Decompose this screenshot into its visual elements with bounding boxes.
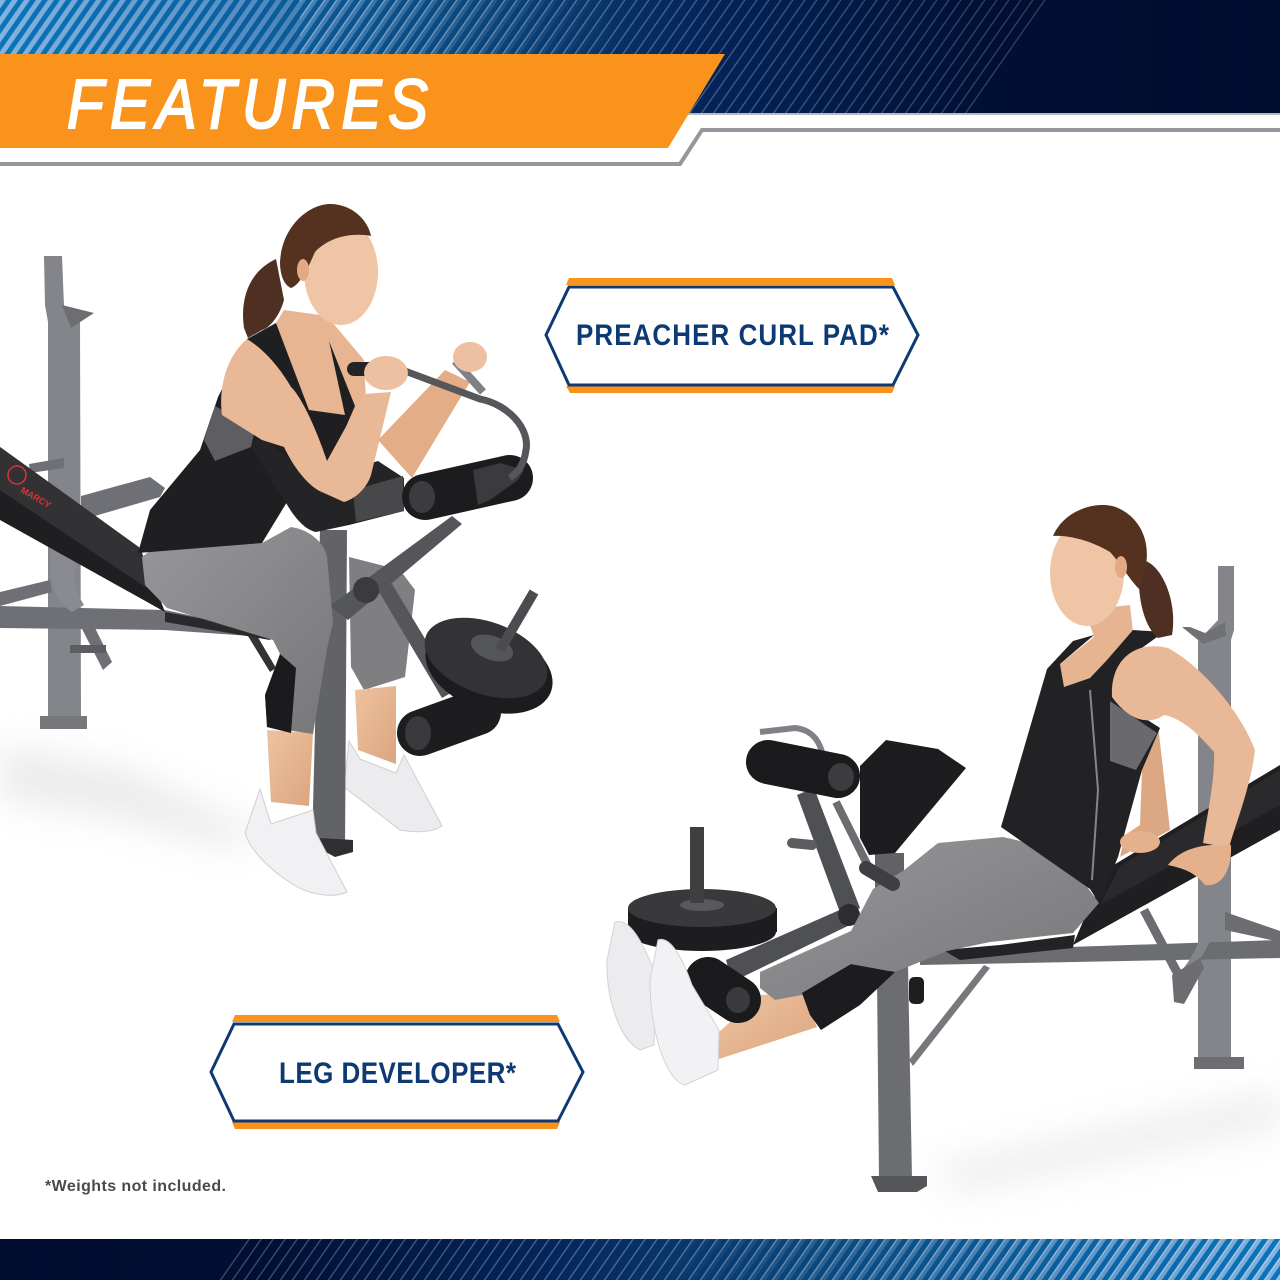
curl bar (354, 361, 527, 478)
woman: legs (142, 527, 347, 895)
rear upright (1182, 566, 1244, 1069)
callout: preacher curl pad (546, 278, 918, 393)
woman: tank top (138, 323, 364, 553)
top banner background (0, 0, 1280, 113)
title banner (0, 54, 725, 148)
incline bench pad (0, 447, 165, 612)
upper roller (760, 728, 854, 791)
leggings (760, 837, 1099, 1030)
seat pad (943, 935, 1075, 960)
callout text: LEG DEVELOPER* (279, 1056, 516, 1089)
heading: FEATURES (67, 65, 428, 143)
bottom band (0, 1239, 1280, 1280)
leg developer arm (330, 516, 462, 698)
tank top (1001, 630, 1164, 903)
incline bench pad: MARCY (19, 485, 53, 510)
bench frame (0, 458, 276, 672)
leg developer arm (726, 788, 904, 982)
woman: hands (364, 342, 487, 390)
footnote: *Weights not included. (45, 1178, 226, 1195)
photo: leg developer (607, 505, 1280, 1192)
weight plate (413, 592, 565, 730)
lower roller (405, 712, 478, 750)
grips (792, 802, 893, 884)
neck and chest (1060, 605, 1133, 687)
rear arm (1120, 725, 1170, 857)
hands (1120, 831, 1231, 885)
bench frame (871, 870, 1280, 1192)
woman: head (243, 204, 378, 338)
rear leg (344, 557, 442, 832)
callout text: PREACHER CURL PAD* (576, 318, 889, 351)
woman: chest, neck and rear arm (276, 310, 470, 478)
back pad (860, 740, 966, 855)
post and foot (312, 530, 353, 857)
shoes (607, 921, 719, 1085)
front arm (1112, 646, 1255, 848)
weight plate (628, 827, 777, 951)
lower roller (708, 980, 750, 1013)
woman: head (1050, 505, 1173, 638)
callout: leg developer (211, 1015, 583, 1129)
white sweep and grey rules (0, 113, 1280, 164)
preacher pad (251, 439, 404, 532)
seat pad (165, 612, 276, 640)
rear upright (40, 256, 94, 729)
adjustment knob (909, 977, 924, 1004)
incline bench pad (1073, 765, 1280, 945)
calf (719, 993, 817, 1059)
upper roller (409, 463, 524, 513)
woman: front arm (221, 339, 391, 502)
